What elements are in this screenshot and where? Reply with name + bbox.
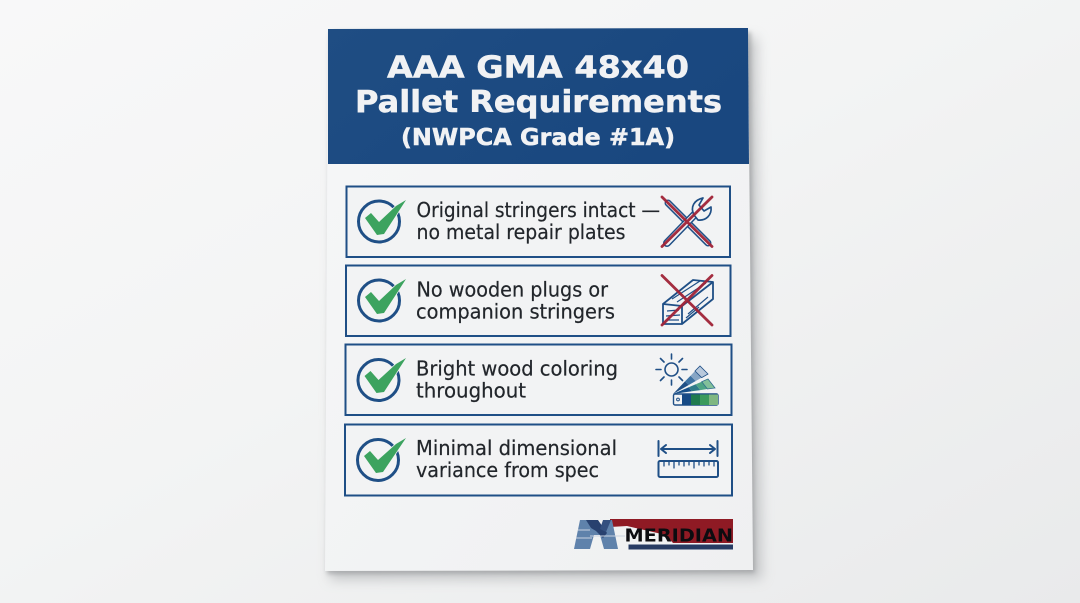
requirement text: companion stringers — [416, 300, 615, 324]
lower swatch blade — [673, 379, 715, 394]
title: AAA GMA 48x40 — [387, 50, 689, 86]
requirement text — [416, 356, 618, 402]
title: Pallet Requirements — [355, 85, 722, 120]
header banner — [328, 28, 749, 164]
requirement text: throughout — [416, 378, 526, 402]
upper swatch blade — [673, 366, 708, 394]
icon: ruler with span arrow — [658, 441, 718, 477]
requirement text — [416, 278, 615, 324]
logo wordmark: MERIDIAN — [624, 526, 733, 546]
row 4: dimensional variance — [345, 424, 732, 496]
requirement text: Minimal dimensional — [416, 436, 617, 460]
requirement text — [416, 436, 617, 482]
requirement text: Bright wood coloring — [416, 356, 618, 380]
title: (NWPCA Grade #1A) — [401, 125, 675, 151]
requirement text: Original stringers intact — — [416, 198, 660, 222]
logo: Meridian — [574, 519, 733, 550]
row 3: bright wood — [346, 344, 732, 415]
icon: check mark — [358, 438, 406, 480]
logo red and navy bars — [610, 519, 733, 550]
icon: sun and colour swatches — [656, 354, 718, 405]
poster shadow — [327, 32, 762, 580]
requirement text — [416, 198, 660, 244]
requirement text: no metal repair plates — [416, 220, 626, 244]
title — [355, 50, 722, 151]
poster sheet — [325, 28, 753, 571]
row 2: no plugs — [346, 266, 730, 336]
requirement text: No wooden plugs or — [416, 278, 609, 302]
requirement text: variance from spec — [416, 458, 599, 482]
icon: crossed out tools — [662, 197, 712, 246]
icon: check mark — [358, 358, 406, 400]
icon: check mark — [358, 200, 406, 242]
icon: check mark — [358, 279, 406, 321]
icon: crossed out lumber — [662, 276, 713, 325]
row 1: original stringers — [346, 186, 730, 257]
logo mark — [574, 520, 625, 549]
